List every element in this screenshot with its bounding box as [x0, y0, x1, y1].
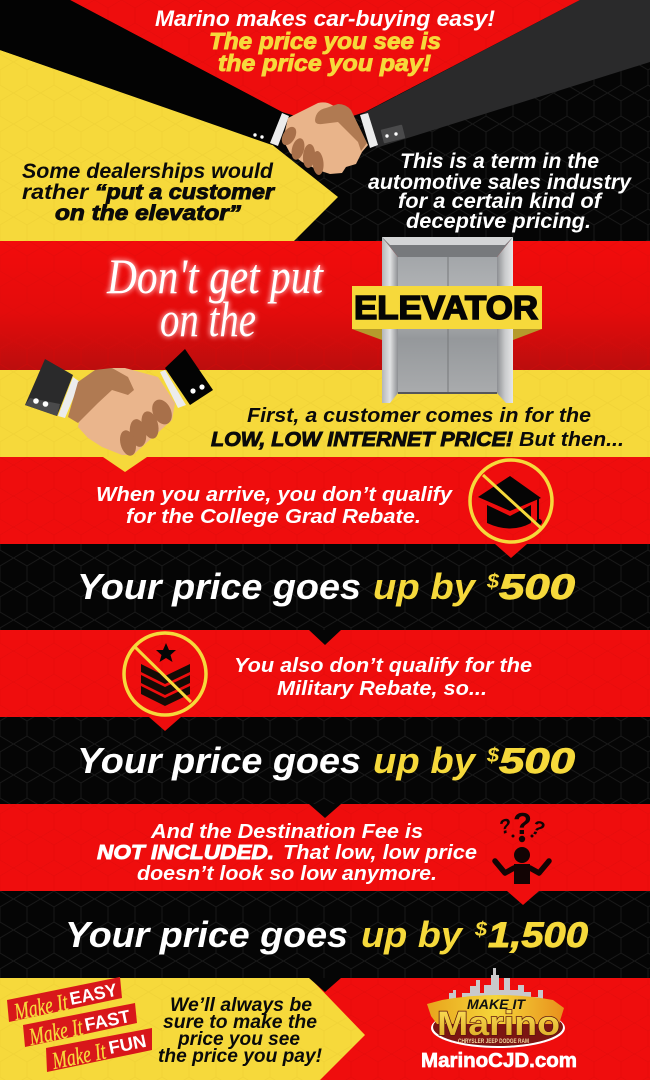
text: college grad rebate: for the College Grad Rebate. — [126, 506, 421, 528]
heading: Marino makes car-buying easy: the price you pay! — [218, 50, 431, 76]
banners: make it easy fast fun — [7, 977, 152, 1075]
banners: make it easy fast fun: Make It — [11, 989, 71, 1026]
text: some dealerships: rather “put a customer — [22, 181, 276, 204]
icon: no graduation cap — [470, 460, 552, 542]
stat: price up 500 second: $ — [486, 745, 500, 767]
icon: handshake with suit arms — [0, 0, 650, 175]
text: destination fee: doesn’t look so low anymore. — [137, 862, 437, 885]
text: closing promise: price you see — [177, 1028, 300, 1050]
icon: confused person: ? — [513, 806, 532, 841]
text: closing promise — [158, 994, 322, 1067]
icon: elevator — [382, 237, 513, 403]
text: destination fee: And the Destination Fee is — [150, 820, 423, 843]
stat: price up 500: 500 — [499, 568, 576, 607]
text: some dealerships — [22, 160, 276, 225]
banners: make it easy fast fun: FAST — [83, 1006, 132, 1035]
icon: confused person: ? — [497, 815, 514, 839]
text: some dealerships: Some dealerships would — [22, 160, 274, 183]
panel: title band — [0, 241, 650, 370]
banner: ELEVATOR: ELEVATOR — [354, 289, 538, 326]
stat: price up 500: $ — [486, 571, 500, 593]
banners: make it easy fast fun: FUN — [107, 1031, 148, 1058]
text: military rebate: You also don’t qualify for the — [234, 655, 532, 677]
text: term explanation: for a certain kind of — [398, 189, 603, 213]
stat: price up 500 second — [77, 740, 576, 781]
text: destination fee — [97, 820, 477, 885]
panel: price up band 2 — [0, 717, 650, 804]
text: some dealerships: on the elevator” — [55, 202, 242, 225]
text: term explanation — [368, 149, 632, 233]
text: destination fee: That low, low price — [283, 841, 477, 864]
text: closing promise: the price you pay! — [158, 1045, 322, 1067]
logo: Make It Marino — [427, 968, 565, 1048]
stat: price up 500 second: 500 — [499, 742, 576, 781]
panel: intro background — [0, 0, 650, 241]
icon: confused person — [495, 806, 549, 884]
stat: price up 1500: 1,500 — [488, 916, 589, 955]
heading: Marino makes car-buying easy — [155, 6, 495, 76]
text: first a customer — [211, 404, 624, 451]
icon: no military rank — [124, 633, 206, 715]
panel: price up band 3 — [0, 891, 650, 978]
text: closing promise: We’ll always be — [170, 994, 312, 1016]
logo: Make It Marino: CHRYSLER JEEP DODGE RAM — [458, 1039, 529, 1045]
text: first a customer: But then... — [519, 428, 624, 451]
heading: Marino makes car-buying easy: The price you see is — [209, 28, 441, 54]
stat: price up 500: Your price goes — [77, 566, 361, 607]
text: first a customer: First, a customer comes in for the — [247, 404, 591, 427]
title: neon script: Don't get put — [106, 248, 324, 304]
icon: handshake small — [25, 349, 213, 457]
text: closing promise: sure to make the — [163, 1011, 317, 1033]
text: military rebate — [234, 655, 532, 700]
banners: make it easy fast fun: Make It — [26, 1014, 86, 1051]
banners: make it easy fast fun: EASY — [68, 980, 119, 1009]
text: term explanation: automotive sales industry — [368, 170, 632, 194]
panel: destination fee band — [0, 804, 650, 891]
title: neon script — [106, 248, 324, 347]
title: neon script: on the — [160, 291, 256, 347]
stat: price up 1500: $ — [474, 919, 488, 941]
text: military rebate: Military Rebate, so... — [277, 678, 487, 700]
text: website: MarinoCJD.com — [421, 1050, 577, 1072]
text: college grad rebate — [96, 484, 453, 528]
text: term explanation: deceptive pricing. — [406, 209, 591, 233]
panel: first step band — [0, 370, 650, 457]
banners: make it easy fast fun: Make It — [49, 1038, 109, 1075]
heading: Marino makes car-buying easy: Marino makes car-buying easy! — [155, 6, 495, 31]
text: college grad rebate: When you arrive, you don’t qualify — [96, 484, 453, 506]
text: term explanation: This is a term in the — [400, 149, 599, 173]
logo: Make It Marino: Marino — [437, 1005, 560, 1043]
text: destination fee: NOT INCLUDED. — [97, 841, 274, 864]
panel: college grad band — [0, 457, 650, 544]
stat: price up 1500 — [65, 914, 589, 955]
stat: price up 1500: up by — [361, 914, 464, 955]
logo: Make It Marino: MAKE IT — [467, 996, 526, 1012]
stat: price up 1500: Your price goes — [65, 914, 348, 955]
stat: price up 500: up by — [373, 566, 477, 607]
stat: price up 500 second: Your price goes — [77, 740, 361, 781]
stat: price up 500 — [77, 566, 576, 607]
stat: price up 500 second: up by — [373, 740, 477, 781]
panel: price up band 1 — [0, 544, 650, 630]
panel: footer — [0, 978, 650, 1080]
text: first a customer: LOW, LOW INTERNET PRICE! — [211, 428, 513, 451]
banner: ELEVATOR — [352, 286, 542, 340]
icon: confused person: ? — [529, 817, 547, 841]
panel: military band — [0, 630, 650, 717]
